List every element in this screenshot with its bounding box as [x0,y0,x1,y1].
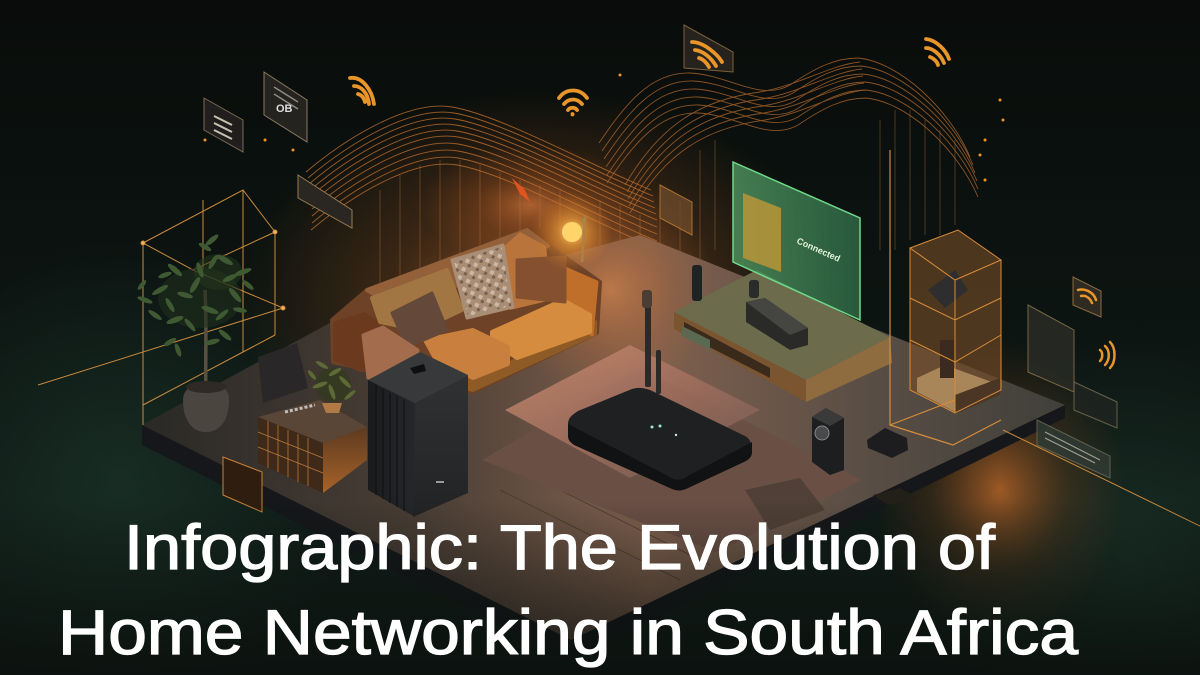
hologram panel: stats: OB [276,103,293,115]
hologram panel: left small [204,98,243,152]
label panel [1037,420,1110,478]
plant with pot [136,233,255,432]
patterned cushion [452,245,513,318]
phone on floor [873,488,918,505]
sofa left seat cushion [425,330,508,378]
platform floor [142,235,1065,660]
right hologram panels [1003,277,1200,526]
wall: vertical signal lines [380,110,955,300]
plant wireframe box [38,190,285,425]
lower panel [1074,382,1117,428]
wifi panel right [1073,277,1101,317]
hologram panel: near lamp [660,185,692,235]
projector on console [692,265,808,350]
side table with glass grid [223,400,367,512]
sofa [332,230,600,392]
hologram panel: near wave [298,175,352,228]
floor document panel [745,478,825,530]
rust cushion [517,257,565,302]
sofa right seat cushion [492,300,590,358]
wifi icon 3 [692,42,722,67]
shelf wireframe with objects [890,150,1001,445]
signal wave: second arc [599,58,978,213]
orange node on wave [512,178,530,202]
floor lamp [532,192,612,272]
chair screen [258,343,308,403]
sofa right arm [563,268,597,335]
wifi panel: top [684,25,733,72]
small black gadget [867,428,908,458]
title line 2: Home Networking in South Africa [58,598,1079,668]
router antennas [642,290,661,394]
wifi icons [350,39,949,114]
sparks [204,74,1004,182]
title backdrop shade [0,500,1200,675]
flat router [568,388,752,490]
media console [674,270,892,402]
brown front cushion [392,293,447,347]
title line 1: Infographic: The Evolution of [124,513,996,583]
green holographic screen: Connected [795,236,842,264]
hologram panel: stats [264,72,307,142]
tan back cushion [372,270,462,330]
throw blanket [363,327,418,378]
small plant in pot [307,360,357,413]
wall camera device [812,408,844,475]
wifi icon 2 [559,90,587,114]
rug [482,345,862,552]
wall glow behind sofa [505,180,715,400]
wifi icon 1 [350,78,374,104]
green holographic screen [733,162,860,320]
wifi icon 4 [926,39,949,65]
tower router [368,352,468,517]
ray line [1003,430,1200,526]
signal wave: first arc [306,106,657,248]
title [58,513,1079,668]
wifi side icon [1100,342,1114,368]
data panel right [1028,305,1074,392]
